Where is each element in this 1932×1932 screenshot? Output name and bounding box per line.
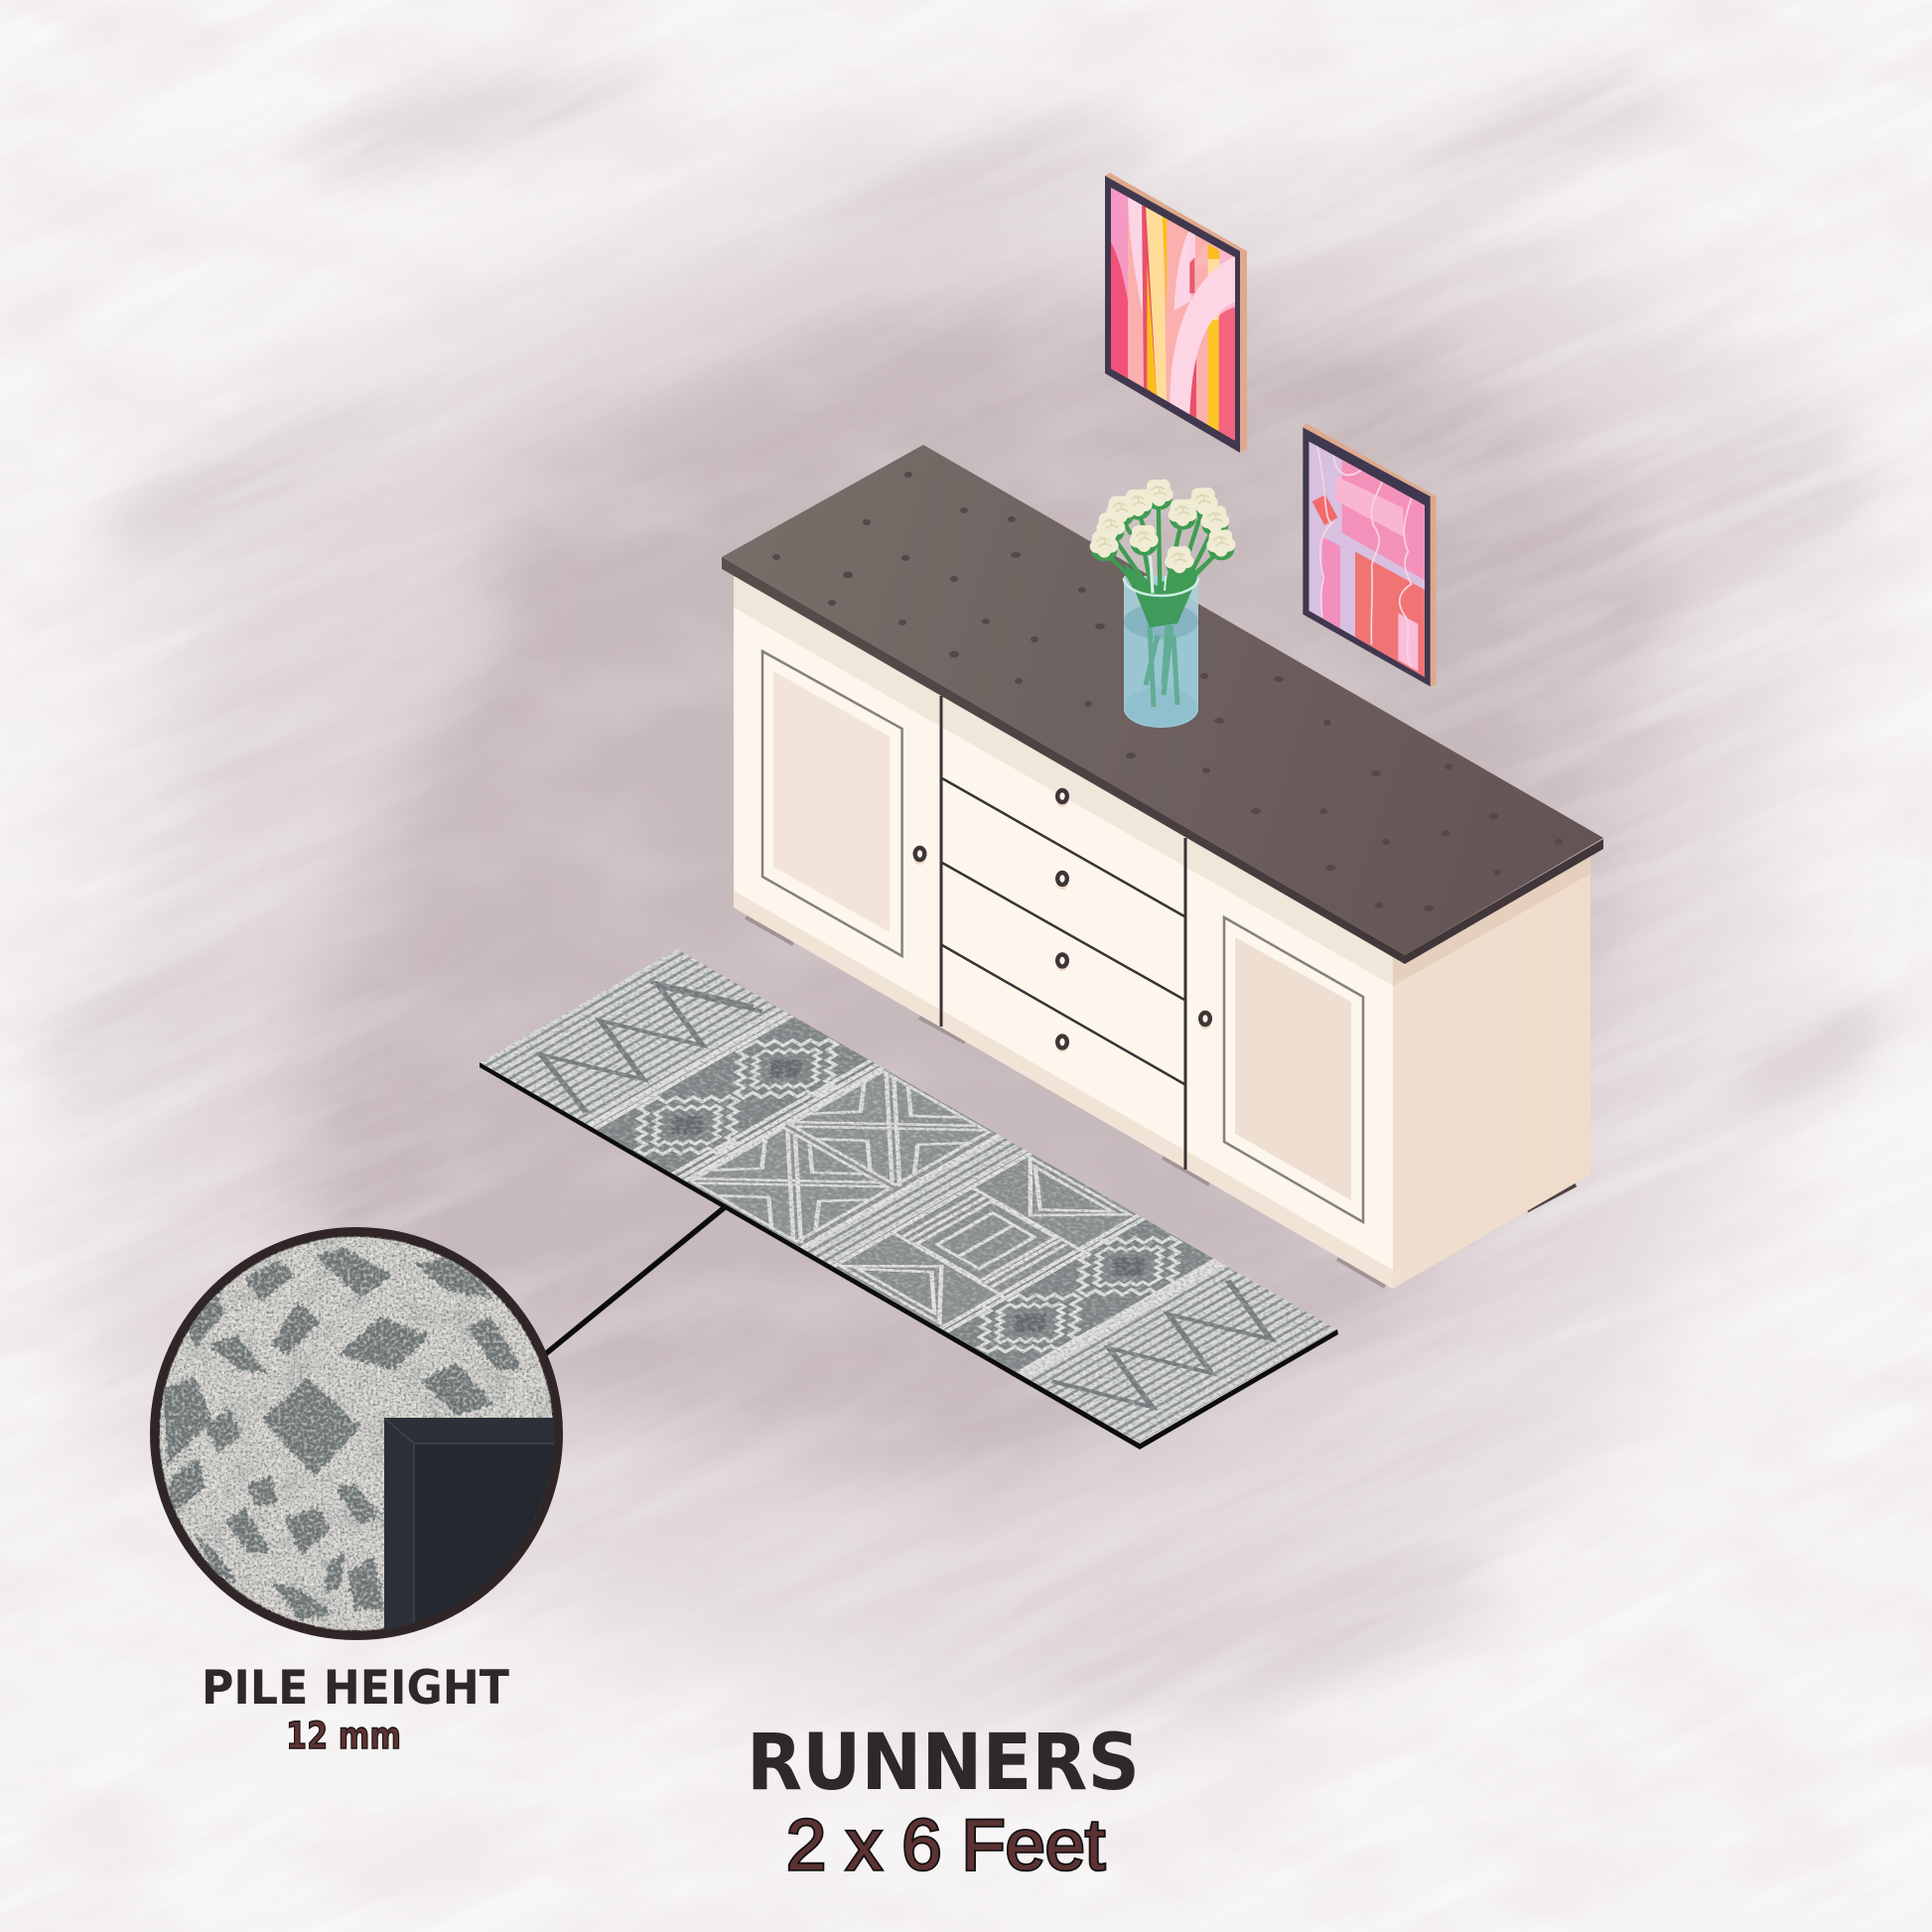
pile height label: PILE HEIGHT	[202, 1661, 509, 1716]
glass vase body	[1124, 576, 1198, 728]
countertop speckles	[772, 472, 1563, 911]
title: runners: RUNNERS	[747, 1719, 1140, 1808]
zigzag motif near end	[504, 965, 761, 1112]
subtitle: size: 2 x 6 Feet	[786, 1806, 1105, 1885]
cabinet front face	[734, 566, 1393, 1289]
front plinth band	[734, 891, 1393, 1289]
woven light band lines	[589, 1012, 1222, 1377]
door and drawer dividers	[941, 696, 1185, 1170]
pile detail circle callout	[149, 1226, 576, 1643]
right door panel	[1224, 917, 1363, 1222]
circle frame	[155, 1232, 558, 1635]
rose bouquet	[1090, 480, 1235, 594]
countertop edge	[722, 557, 1603, 964]
stepped diamond motifs	[701, 1020, 872, 1118]
wall picture: abstract blocks	[1303, 423, 1437, 687]
pile mottled shading	[149, 1226, 566, 1643]
wall picture: abstract stripes	[1105, 173, 1247, 453]
pile height value: 12 mm	[286, 1715, 401, 1757]
countertop surface	[722, 445, 1603, 955]
bowtie motifs	[786, 1069, 992, 1187]
left door panel	[762, 651, 902, 956]
pile grain texture	[149, 1226, 566, 1643]
pile diamond pattern	[162, 1248, 523, 1620]
rug woven texture	[480, 949, 1336, 1443]
front top shadow band	[734, 566, 1393, 986]
callout leader line	[544, 1207, 725, 1355]
vase with white roses	[1090, 480, 1235, 728]
sideboard cabinet	[722, 445, 1603, 1289]
drawer and door knobs	[913, 790, 1211, 1052]
cabinet side face	[1393, 874, 1590, 1289]
side shadow band	[1393, 854, 1590, 986]
runner rug	[480, 949, 1338, 1449]
cabinet legs	[746, 917, 1576, 1287]
rug surface pattern	[480, 949, 1336, 1443]
vase front rim	[1124, 578, 1198, 596]
rug backing corner	[384, 1418, 576, 1643]
submerged stems	[1146, 625, 1177, 707]
key and triangle motif	[837, 1156, 1135, 1326]
leaves in vase mouth	[1124, 562, 1197, 627]
pile white fleck texture	[149, 1226, 566, 1643]
rug black edge	[480, 1062, 1338, 1449]
zigzag motif far end	[1052, 1281, 1301, 1423]
